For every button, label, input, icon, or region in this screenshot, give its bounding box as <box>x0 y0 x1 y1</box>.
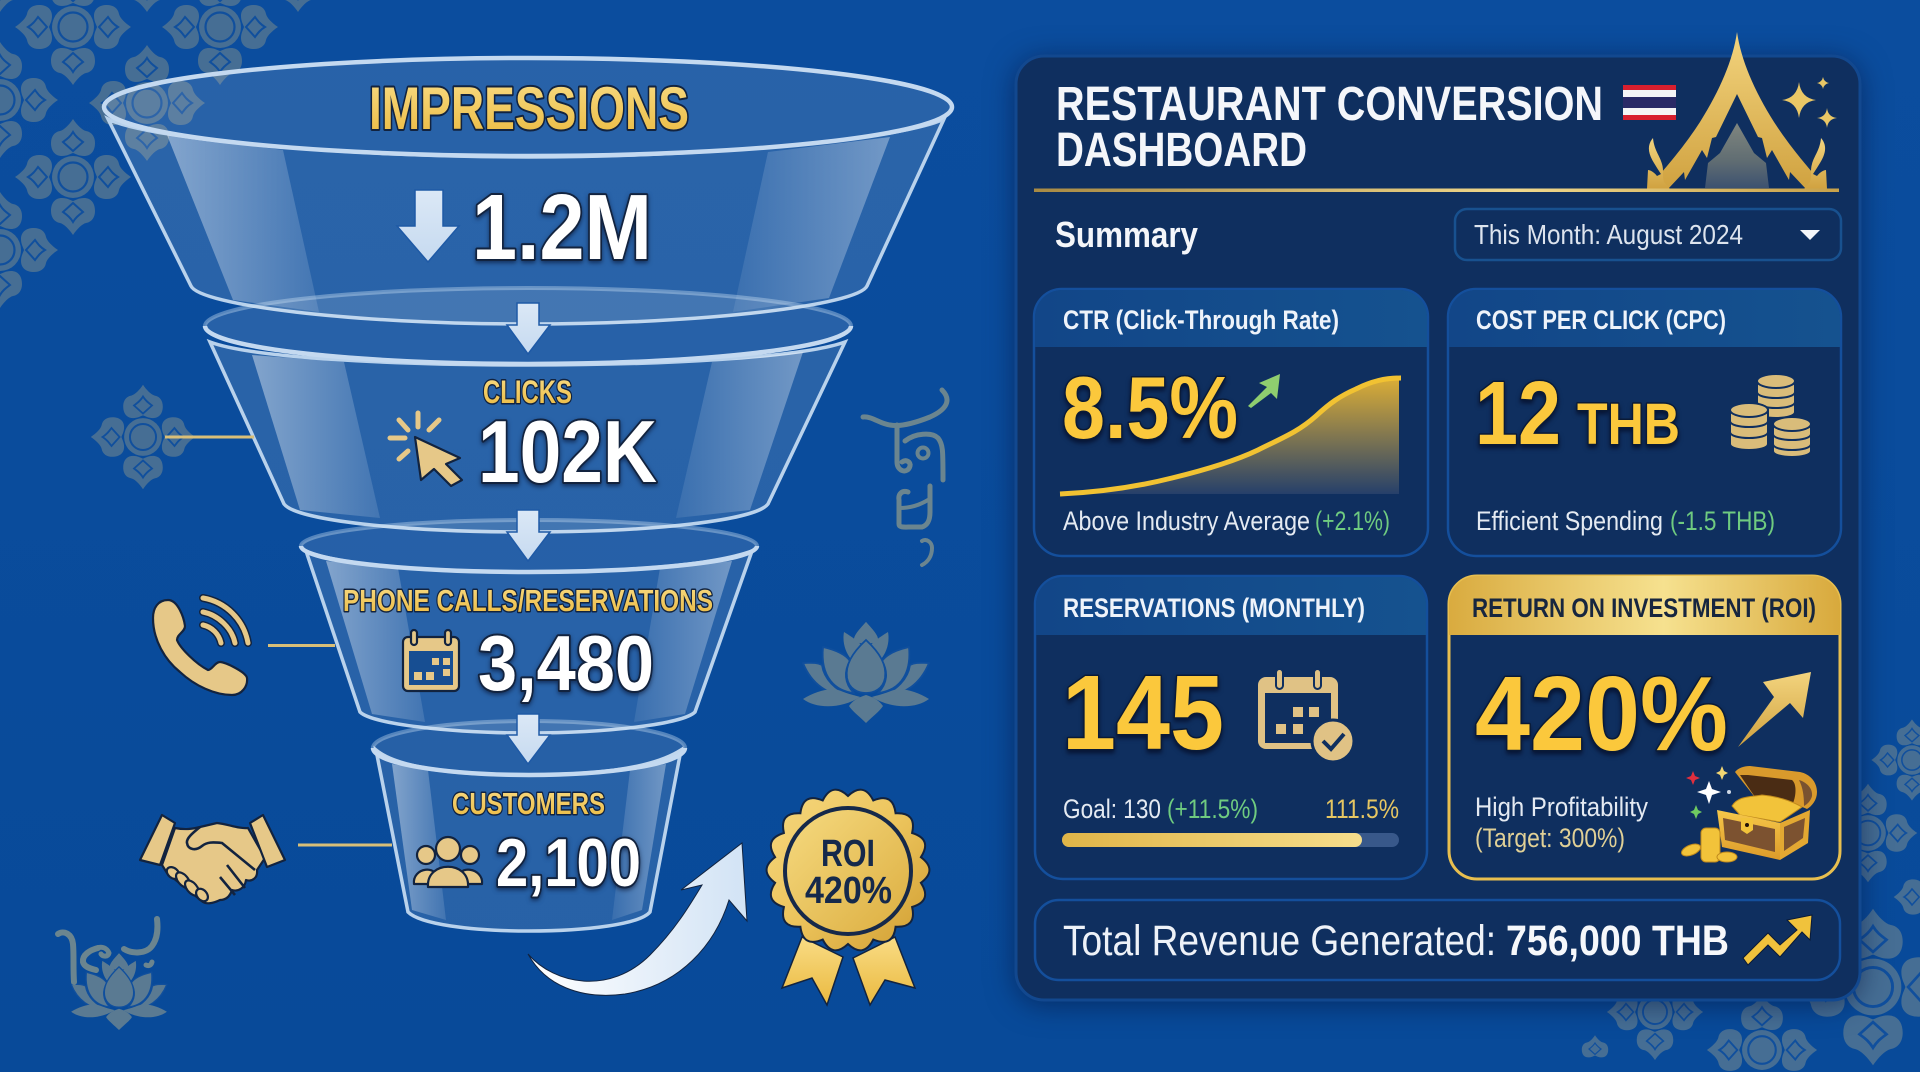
value: 3,480 <box>478 619 654 707</box>
caption: High Profitability <box>1475 792 1648 822</box>
icon: treasure chest <box>1680 766 1817 862</box>
caption: Above Industry Average <box>1063 506 1310 536</box>
curved growth arrow <box>528 843 747 995</box>
decorative lotus right of funnel <box>803 622 929 723</box>
icon: handshake <box>140 815 285 904</box>
value: 8.5% <box>1062 358 1238 457</box>
top rim <box>104 58 952 156</box>
connector line: phone <box>268 644 335 647</box>
cursor click icon <box>390 413 462 486</box>
icon: calendar with check <box>1258 669 1354 762</box>
progress value: 111.5% <box>1325 794 1399 824</box>
goal caption: Goal: 130 <box>1063 794 1161 824</box>
value: 420% <box>1475 655 1728 773</box>
ROI rosette badge: 420% <box>805 870 892 912</box>
title divider <box>1034 188 1839 192</box>
funnel stage 2: clicks <box>205 288 851 532</box>
card heading: CTR (Click-Through Rate) <box>1063 305 1339 335</box>
front rim arc <box>373 748 685 775</box>
funnel stage 4: customers <box>373 721 685 931</box>
card: reservations <box>1035 576 1427 879</box>
dashboard title: DASHBOARD <box>1056 124 1307 177</box>
label: IMPRESSIONS <box>369 75 689 142</box>
revenue value: 756,000 THB <box>1506 917 1729 965</box>
top rim <box>301 520 757 572</box>
ROI rosette badge <box>767 790 929 1005</box>
decorative Thai floral pattern, top left <box>0 0 356 308</box>
card heading: COST PER CLICK (CPC) <box>1476 305 1726 335</box>
card: CTR <box>1034 289 1428 556</box>
dashboard title: RESTAURANT CONVERSION <box>1056 78 1603 131</box>
badge text: ROI <box>821 833 875 875</box>
people icon <box>414 837 482 887</box>
connector line: customers <box>298 844 392 846</box>
card heading: RETURN ON INVESTMENT (ROI) <box>1472 593 1816 623</box>
value: 102K <box>478 402 657 501</box>
caption: Efficient Spending <box>1476 506 1663 536</box>
icon: Thai flag <box>1623 85 1676 120</box>
month dropdown: This Month: August 2024 <box>1474 219 1743 250</box>
flow arrow: impressions to clicks <box>507 303 550 354</box>
green trend arrow <box>1248 374 1280 408</box>
card: CTR: (+2.1%) <box>1315 506 1390 536</box>
funnel stage 3: phone calls and reservations <box>301 520 757 733</box>
top rim <box>373 721 685 775</box>
icon: zigzag growth arrow <box>1743 915 1812 965</box>
card: cost per click <box>1448 289 1841 556</box>
month dropdown <box>1455 209 1841 260</box>
front rim arc <box>301 546 757 572</box>
calendar icon <box>403 630 459 691</box>
down arrow icon <box>397 190 459 262</box>
glass bowl body <box>108 119 944 324</box>
card heading: RESERVATIONS (MONTHLY) <box>1063 593 1365 623</box>
icon: phone with signal waves <box>153 598 248 695</box>
value: 12 <box>1475 364 1561 464</box>
value: 2,100 <box>496 825 641 901</box>
label: CLICKS <box>483 374 572 410</box>
flow arrow: clicks to phone calls <box>507 510 550 561</box>
summary heading: Summary <box>1055 214 1198 255</box>
label: CUSTOMERS <box>452 786 605 821</box>
gold up arrow <box>1738 672 1811 747</box>
top rim <box>205 288 851 364</box>
funnel stage 1: impressions <box>104 58 952 324</box>
flow arrow: phone calls to customers <box>507 714 550 764</box>
ribbons <box>782 937 843 1005</box>
revenue label: Total Revenue Generated: <box>1063 917 1496 965</box>
label: PHONE CALLS/RESERVATIONS <box>343 583 713 618</box>
card: cost per click: (-1.5 THB) <box>1670 506 1775 536</box>
card: return on investment <box>1449 576 1840 879</box>
icon: sparkles <box>1782 77 1837 128</box>
front rim arc <box>205 326 851 364</box>
decorative Thai floral pattern, bottom right <box>1582 719 1920 1071</box>
value: 1.2M <box>472 175 652 279</box>
decorative Thai flourish right of funnel <box>863 390 947 565</box>
icon: treasure sparkles <box>1686 766 1731 819</box>
panel: restaurant conversion dashboard <box>1016 32 1860 1000</box>
progress bar <box>1062 833 1399 847</box>
connector line: clicks <box>165 436 254 438</box>
area chart <box>1060 378 1401 494</box>
dashboard title <box>1056 78 1603 177</box>
total revenue bar <box>1035 900 1840 980</box>
icon: coin stacks <box>1730 374 1811 457</box>
decorative lotus with flourish, bottom left <box>58 919 167 1030</box>
card: reservations: (+11.5%) <box>1167 794 1258 824</box>
icon: Thai temple roof <box>1647 32 1827 189</box>
unit: THB <box>1577 392 1680 457</box>
card: return on investment: (Target: 300%) <box>1475 823 1625 853</box>
value: 145 <box>1062 654 1224 772</box>
ornament flower beside clicks <box>91 385 195 489</box>
